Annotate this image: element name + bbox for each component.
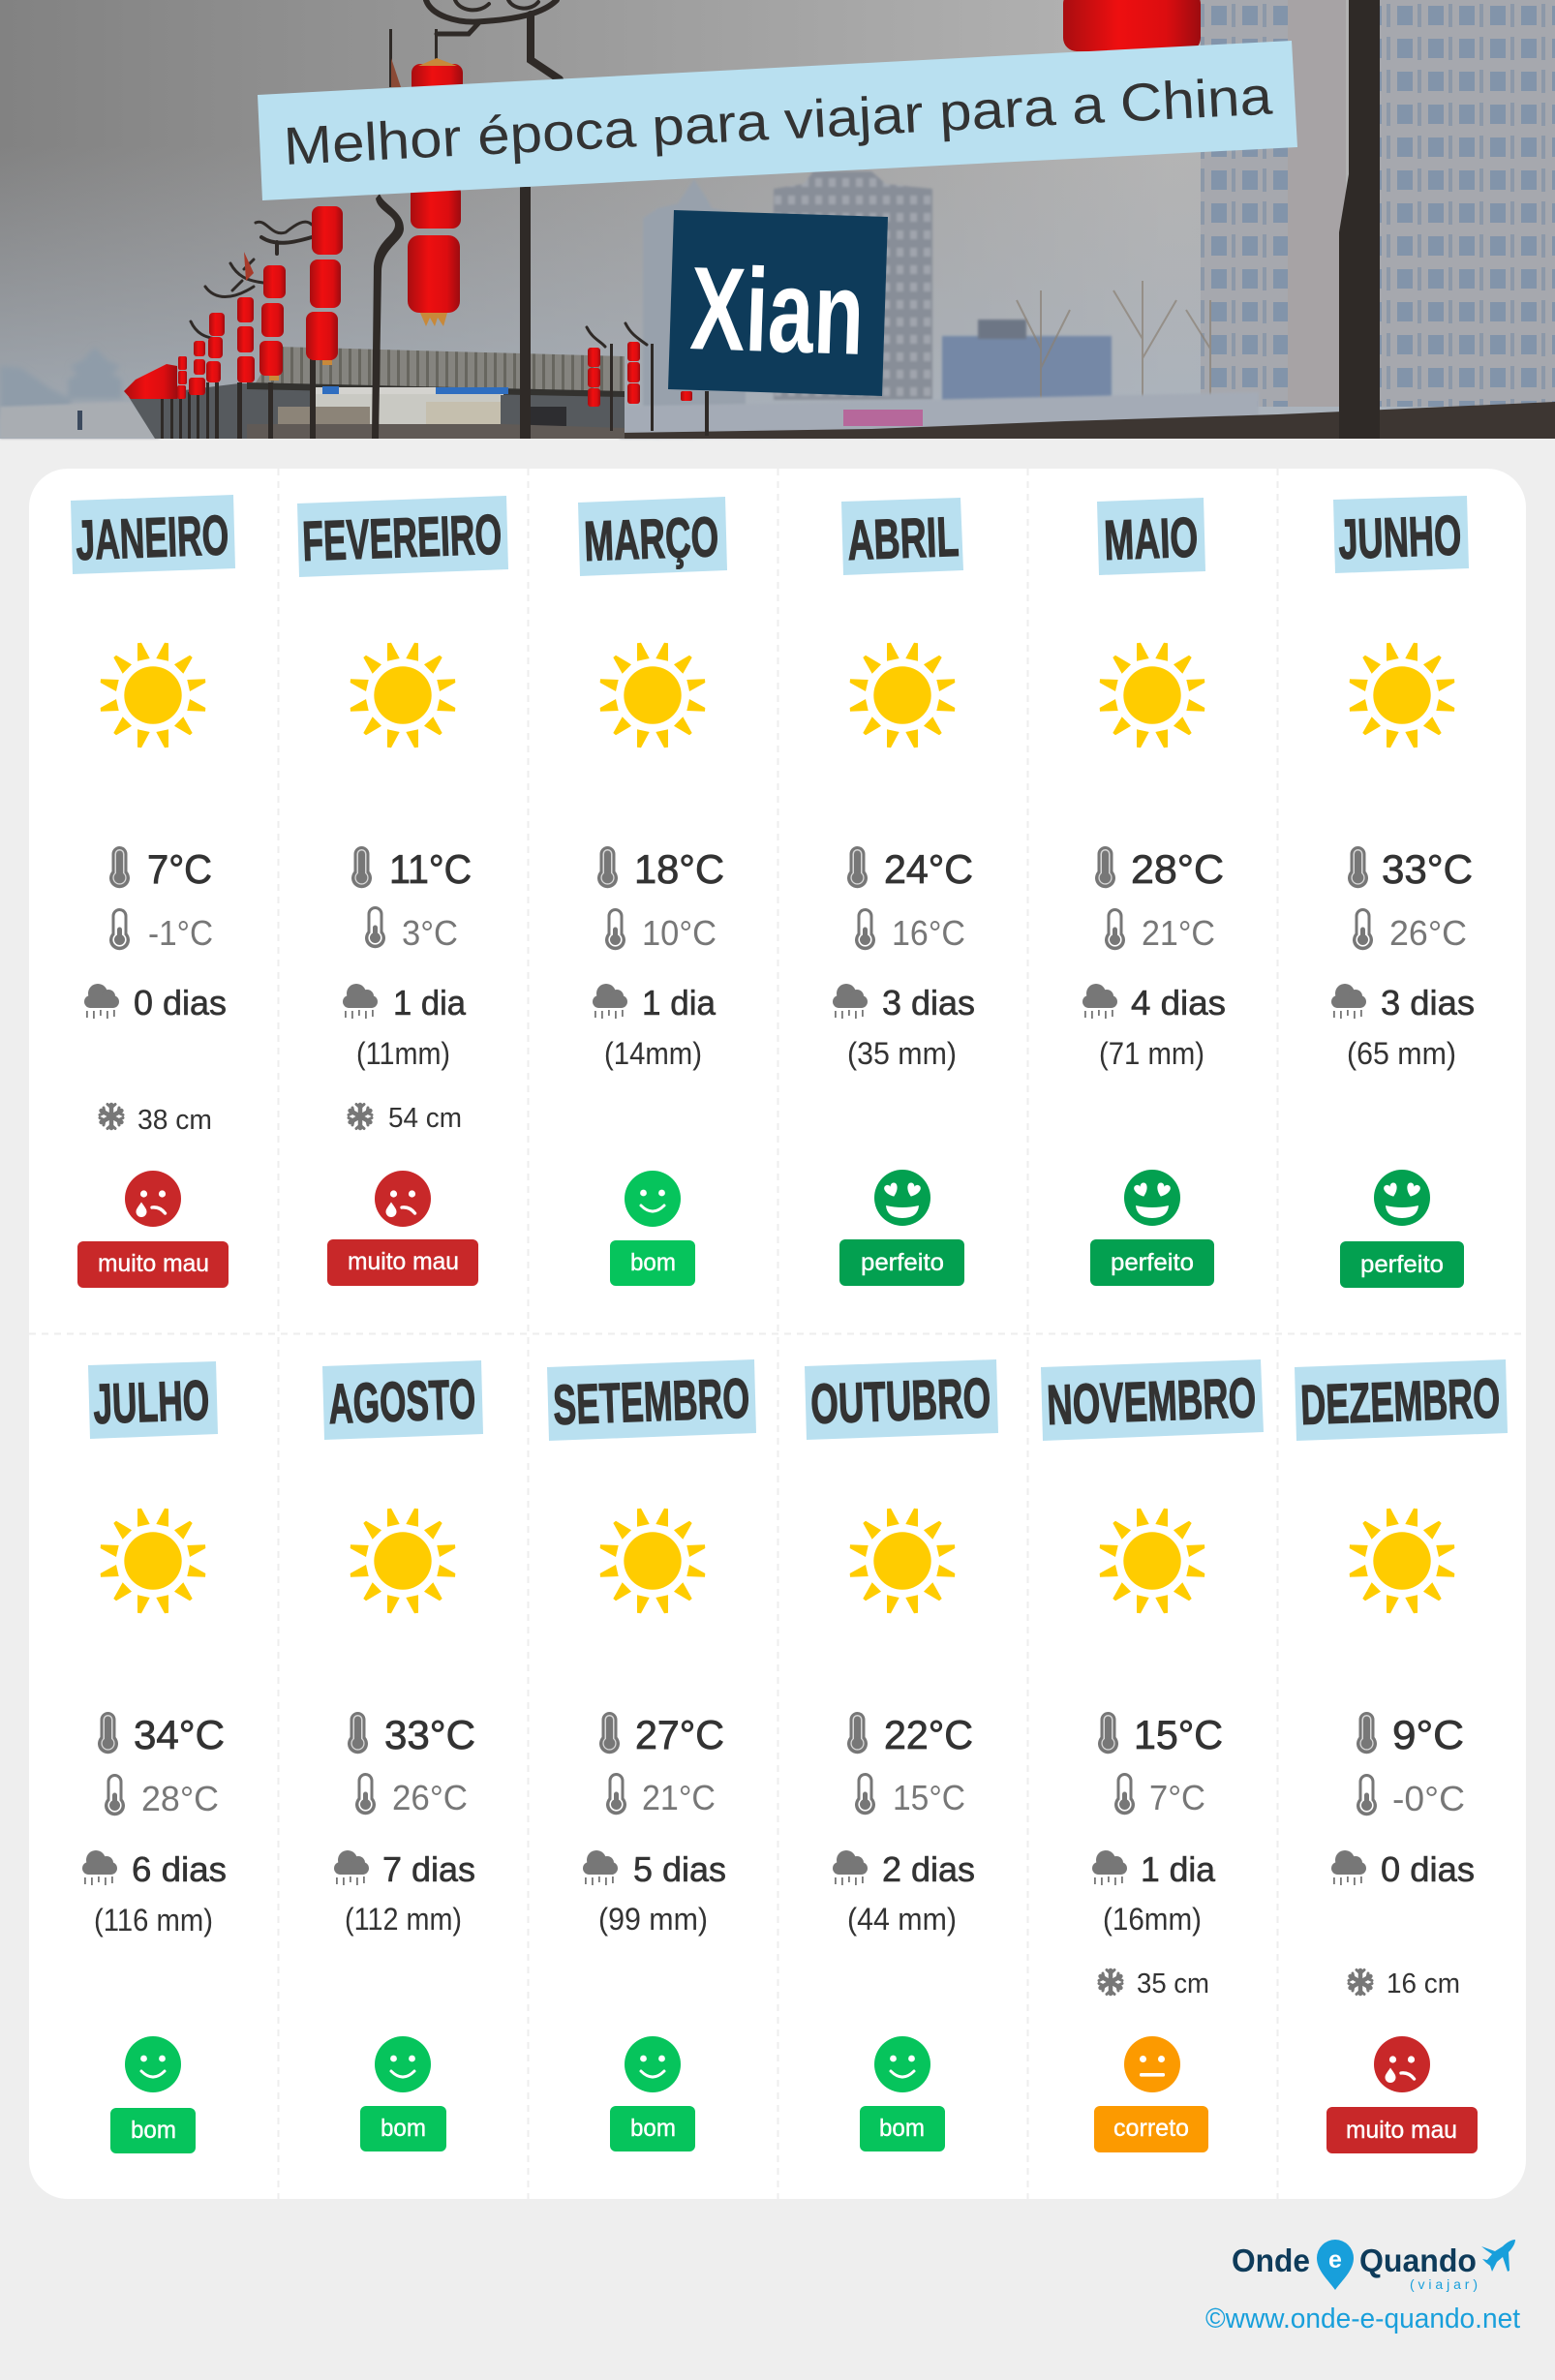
max temperature: 7°C [147, 846, 212, 892]
icon: sun [850, 643, 955, 748]
min temperature: 15°C [893, 1778, 965, 1817]
rating badge [77, 1241, 229, 1288]
month label [71, 495, 235, 574]
rating badge [610, 2106, 695, 2151]
rain amount: (99 mm) [598, 1902, 708, 1937]
snow: 16 cm [1387, 1968, 1460, 1999]
rain days: 6 dias [132, 1849, 227, 1889]
min temperature [109, 908, 213, 953]
max temperature: 27°C [635, 1712, 724, 1757]
snow [1349, 1968, 1460, 1999]
rain amount: (65 mm) [1347, 1036, 1456, 1071]
icon: sun [351, 643, 455, 748]
rain days: 1 dia [393, 983, 467, 1022]
icon: rating face [125, 1171, 181, 1227]
min temperature: 10°C [642, 913, 717, 953]
icon: rating face [874, 2036, 930, 2092]
rain days [583, 1849, 726, 1889]
icon: map pin: e [1328, 2246, 1342, 2273]
snow [1099, 1968, 1209, 1999]
rating badge: perfeito [861, 1249, 944, 1276]
month label [547, 1359, 756, 1441]
icon: sun [101, 643, 205, 748]
icon: sun [101, 1509, 205, 1613]
rain amount: (44 mm) [847, 1902, 957, 1937]
min temperature [105, 1774, 219, 1818]
icon: rating face [1374, 1170, 1430, 1226]
title banner [258, 41, 1297, 200]
rain amount: (11mm) [356, 1036, 450, 1071]
logo: Onde e Quando: Quando [1359, 2243, 1477, 2278]
icon: plane [1481, 2240, 1515, 2272]
min temperature: 16°C [892, 913, 965, 953]
rain days: 0 dias [1381, 1849, 1475, 1889]
rain amount: (116 mm) [94, 1903, 213, 1938]
icon: sun [1100, 1509, 1204, 1613]
panel: agosto [322, 1360, 483, 2151]
rain days: 1 dia [642, 983, 717, 1022]
min temperature: 28°C [141, 1779, 219, 1818]
rating badge: perfeito [1360, 1251, 1444, 1278]
header photo: Xian city wall with red lanterns [0, 0, 1555, 439]
rain days [1082, 983, 1226, 1022]
rating badge: bom [630, 2115, 676, 2142]
rain amount: (35 mm) [847, 1036, 957, 1071]
icon: sun [1350, 1509, 1454, 1613]
rain days [82, 1849, 227, 1889]
icon: rating face [1124, 2036, 1180, 2092]
min temperature [1114, 1773, 1205, 1817]
max temperature [109, 846, 212, 892]
title banner: Melhor época para viajar para a China [282, 65, 1274, 176]
month label [841, 498, 963, 575]
logo: Onde e Quando: (viajar) [1410, 2276, 1478, 2292]
rain days: 5 dias [633, 1849, 726, 1889]
rating badge: muito mau [1346, 2117, 1457, 2144]
month label: MAIO [1103, 505, 1199, 572]
max temperature: 33°C [384, 1712, 475, 1757]
rating badge [110, 2108, 196, 2153]
rain days [593, 983, 717, 1022]
month label [1333, 496, 1469, 573]
min temperature [855, 908, 965, 953]
rating badge: bom [630, 1249, 676, 1276]
max temperature [847, 1712, 973, 1757]
max temperature: 18°C [634, 846, 724, 892]
rain days [1092, 1849, 1216, 1889]
icon: sun [600, 643, 705, 748]
max temperature: 28°C [1131, 846, 1224, 892]
logo: Onde e Quando: Onde [1232, 2243, 1310, 2278]
month label: AGOSTO [327, 1367, 476, 1436]
website credit: ©www.onde-e-quando.net [1205, 2304, 1520, 2334]
max temperature: 15°C [1134, 1712, 1223, 1757]
month label [297, 496, 508, 577]
snow [100, 1104, 212, 1136]
snow [349, 1103, 462, 1134]
min temperature [355, 1773, 468, 1817]
icon: rating face [1124, 1170, 1180, 1226]
month label [1097, 498, 1205, 575]
panel: junho [1331, 496, 1475, 1288]
rain amount: (71 mm) [1099, 1036, 1204, 1071]
city label: Xian [668, 210, 888, 396]
rating badge [1326, 2107, 1478, 2153]
icon: rating face [625, 2036, 681, 2092]
min temperature [1353, 908, 1467, 953]
rating badge [610, 1240, 695, 1286]
panel: outubro [805, 1359, 998, 2151]
panel: dezembro [1295, 1359, 1508, 2153]
panel: janeiro [71, 495, 235, 1288]
min temperature [855, 1773, 965, 1817]
max temperature: 11°C [389, 846, 472, 892]
month label [805, 1359, 998, 1440]
min temperature [606, 1773, 716, 1817]
max temperature [1357, 1712, 1464, 1757]
month label: JUNHO [1337, 503, 1462, 571]
max temperature [847, 846, 973, 892]
panel: fevereiro [297, 496, 508, 1286]
rating badge: bom [879, 2115, 925, 2142]
icon: map pin [1317, 2240, 1354, 2290]
panel: março [578, 497, 727, 1286]
rain days [343, 983, 467, 1022]
rain days [833, 983, 975, 1022]
rain days [334, 1849, 475, 1889]
min temperature [365, 906, 458, 953]
panel: julho [82, 1361, 227, 2153]
city label: Xian: Xian [688, 242, 867, 380]
rating badge [839, 1239, 964, 1286]
icon: sun [600, 1509, 705, 1613]
month label [322, 1360, 483, 1440]
rain amount: (112 mm) [345, 1902, 462, 1937]
rain days: 3 dias [882, 983, 975, 1022]
icon: rating face [625, 1171, 681, 1227]
logo: Onde e Quando [1232, 2240, 1515, 2292]
icon: sun [1350, 643, 1454, 748]
month label: SETEMBRO [552, 1367, 750, 1437]
rating badge [360, 2106, 446, 2151]
icon: rating face [375, 1171, 431, 1227]
rating badge [860, 2106, 945, 2151]
month label: MARÇO [583, 505, 719, 573]
month label: OUTUBRO [809, 1366, 991, 1436]
rain days: 7 dias [382, 1849, 475, 1889]
min temperature [605, 908, 717, 953]
rain days: 0 dias [134, 983, 227, 1022]
icon: sun [1100, 643, 1204, 748]
min temperature: -0°C [1392, 1779, 1465, 1818]
min temperature: 3°C [402, 913, 458, 953]
icon: rating face [874, 1170, 930, 1226]
min temperature: 21°C [1142, 913, 1215, 953]
min temperature: 21°C [642, 1778, 716, 1817]
rating badge: bom [131, 2117, 176, 2144]
max temperature: 22°C [884, 1712, 973, 1757]
icon: sun [351, 1509, 455, 1613]
month label [578, 497, 727, 576]
month label: JULHO [92, 1369, 210, 1436]
icon: rating face [125, 2036, 181, 2092]
icon: rating face [375, 2036, 431, 2092]
rain amount: (14mm) [604, 1036, 702, 1071]
rain amount: (16mm) [1103, 1902, 1202, 1937]
snow: 38 cm [137, 1105, 212, 1136]
rain days [1331, 1849, 1475, 1889]
rain days: 1 dia [1141, 1849, 1216, 1889]
rating badge: bom [381, 2115, 426, 2142]
rating badge [1094, 2106, 1208, 2152]
panel: setembro [547, 1359, 756, 2151]
rating badge: correto [1113, 2115, 1189, 2142]
rating badge [1340, 1241, 1464, 1288]
rating badge: muito mau [98, 1250, 209, 1277]
month label [88, 1361, 218, 1439]
max temperature: 9°C [1392, 1712, 1464, 1757]
min temperature: 26°C [392, 1778, 468, 1817]
month label: JANEIRO [75, 503, 229, 572]
month label [1041, 1359, 1264, 1441]
max temperature [351, 846, 472, 892]
min temperature: 7°C [1149, 1778, 1205, 1817]
rain days: 4 dias [1131, 983, 1226, 1022]
max temperature: 34°C [134, 1712, 225, 1757]
icon: sun [850, 1509, 955, 1613]
month label: NOVEMBRO [1046, 1366, 1257, 1437]
rain days [833, 1849, 975, 1889]
rating badge: perfeito [1111, 1249, 1194, 1276]
min temperature: -1°C [148, 913, 213, 953]
rain days [84, 983, 227, 1022]
panel: abril [833, 498, 975, 1286]
snow: 54 cm [388, 1103, 462, 1134]
rating badge: muito mau [348, 1248, 459, 1275]
rain days [1331, 983, 1475, 1022]
card: monthly calendar panel [29, 469, 1526, 2199]
month label: ABRIL [846, 505, 960, 572]
month label: FEVEREIRO [301, 503, 503, 573]
snow: 35 cm [1137, 1968, 1209, 1999]
rain days: 3 dias [1381, 983, 1475, 1022]
max temperature: 33°C [1382, 846, 1473, 892]
panel: novembro [1041, 1359, 1264, 2152]
rating badge [1090, 1239, 1214, 1286]
min temperature [1357, 1774, 1465, 1818]
rating badge [327, 1239, 478, 1286]
min temperature: 26°C [1389, 913, 1467, 953]
max temperature: 24°C [884, 846, 973, 892]
min temperature [1105, 908, 1215, 953]
icon: rating face [1374, 2036, 1430, 2092]
panel: maio [1082, 498, 1226, 1286]
rain days: 2 dias [882, 1849, 975, 1889]
